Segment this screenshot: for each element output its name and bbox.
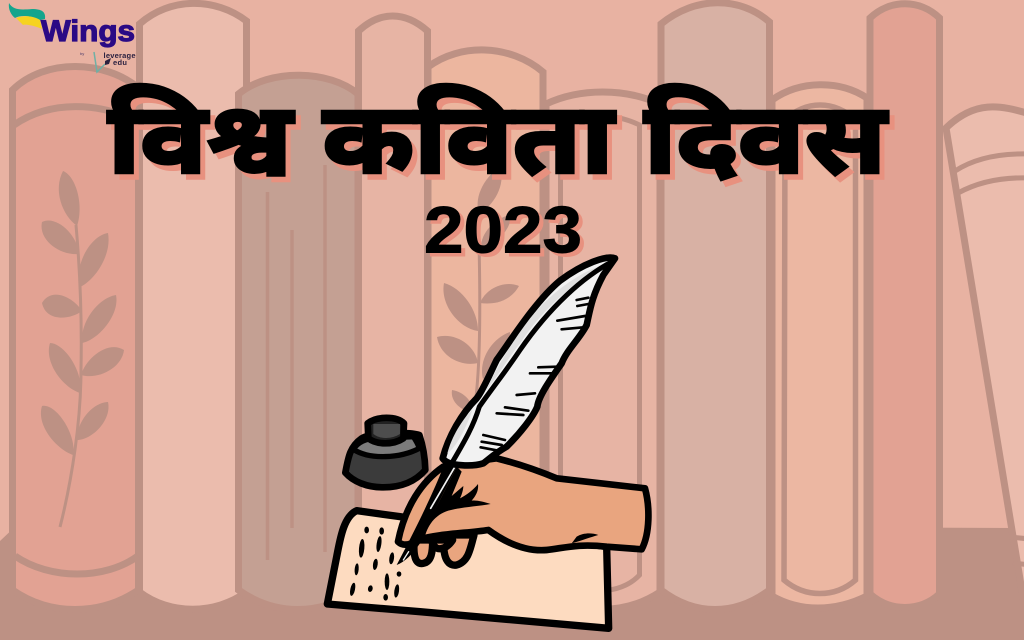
- title shadow: विश्व कविता दिवस: [113, 89, 893, 199]
- logo yellow swoosh: [16, 16, 42, 29]
- logo leverage: leverage: [104, 51, 136, 60]
- logo by label: by: [80, 51, 84, 56]
- writing marks on paper: [349, 527, 401, 601]
- book 8: [772, 85, 867, 608]
- feather barbs: [481, 298, 588, 451]
- title: विश्व कविता दिवस: [108, 84, 888, 194]
- logo edu: edu: [113, 58, 127, 67]
- thumb lines: [419, 467, 491, 542]
- book 5 with plant: [428, 50, 543, 609]
- book 6: [546, 92, 660, 609]
- logo arrow mark: [94, 52, 105, 72]
- feather shaded vane: [485, 264, 607, 392]
- paper sheet: [327, 511, 609, 628]
- logo wordmark: Wings: [41, 15, 135, 48]
- book 3 with lines: [238, 75, 358, 610]
- shelf floor: [0, 524, 1024, 640]
- quill shaft highlight: [431, 467, 455, 508]
- hand: [398, 458, 648, 550]
- feather body: [443, 258, 615, 465]
- plant on book 5: [437, 167, 519, 415]
- logo teal swoosh: [9, 3, 45, 20]
- feather lower shaded vane: [447, 409, 473, 453]
- quill pen shaft: [397, 463, 457, 565]
- nib highlight: [403, 552, 409, 560]
- book 2: [140, 3, 246, 609]
- year shadow: 2023: [428, 196, 586, 270]
- book 10 leaning: [946, 107, 1024, 640]
- lower fingers: [414, 535, 474, 565]
- year: 2023: [424, 192, 582, 266]
- hand crease: [572, 533, 598, 543]
- plant on book 1: [41, 171, 124, 527]
- book 4: [358, 16, 428, 609]
- book 7: [661, 3, 770, 610]
- logo rocket: [105, 58, 111, 65]
- book 9: [870, 4, 940, 608]
- ink bottle: [345, 418, 425, 487]
- feather spine: [452, 261, 613, 463]
- logo: Wings by leverage edu: [9, 3, 136, 72]
- book 1 with plant: [12, 66, 138, 610]
- illustration: hand writing with quill: [327, 258, 648, 628]
